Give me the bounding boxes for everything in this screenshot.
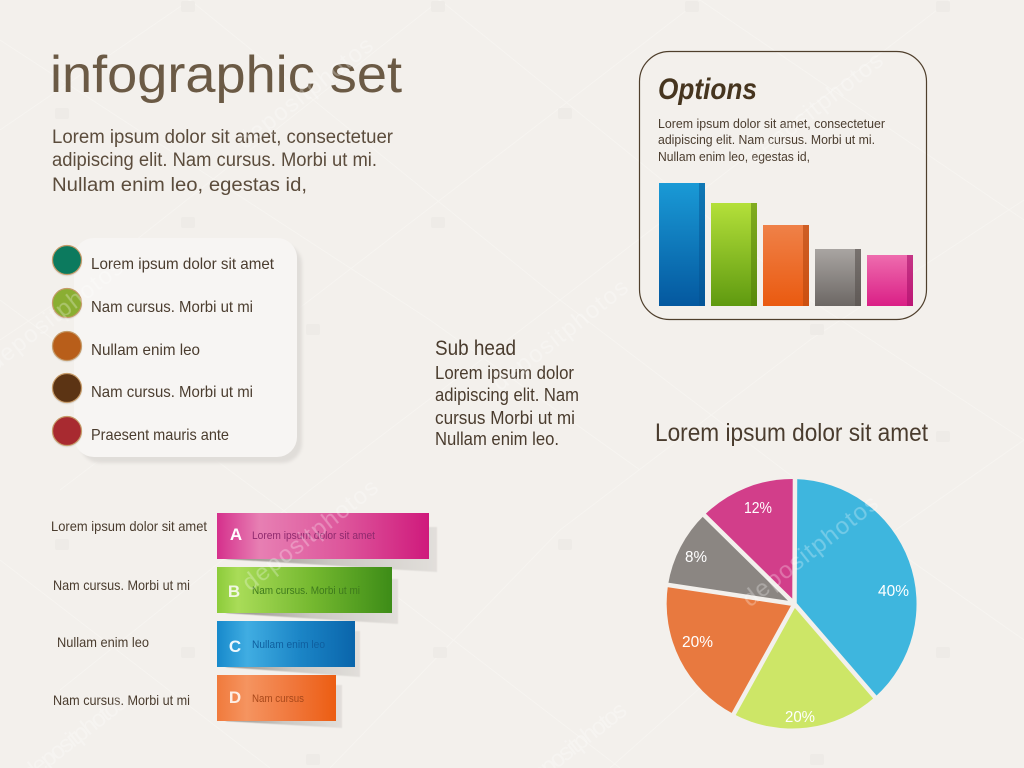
options text: adipiscing elit. Nam cursus. Morbi ut mi. <box>658 132 875 147</box>
legend labels: Nam cursus. Morbi ut mi <box>91 299 253 316</box>
bar: pink <box>867 255 913 306</box>
ribbon D: Nam cursus <box>252 693 304 705</box>
pie labels: 20% <box>682 634 713 651</box>
bar chart <box>659 183 913 306</box>
ribbon row labels: Nullam enim leo <box>57 634 149 650</box>
intro paragraph: adipiscing elit. Nam cursus. Morbi ut mi. <box>52 150 377 171</box>
ribbon C <box>217 621 360 677</box>
slice: blue 40% <box>794 479 917 697</box>
legend dot: brown <box>52 374 82 404</box>
panel: legend list <box>52 238 302 463</box>
bar: blue <box>659 183 705 306</box>
slice: orange 20% <box>667 585 794 714</box>
options text: Nullam enim leo, egestas id, <box>658 149 810 164</box>
ribbon row labels: Nam cursus. Morbi ut mi <box>53 692 190 708</box>
ribbon C: Nullam enim leo <box>252 639 325 651</box>
ribbon A <box>217 513 437 572</box>
sub head text block: Lorem ipsum dolor <box>435 363 574 383</box>
ribbon chart <box>217 513 437 728</box>
legend dot: red <box>52 416 82 447</box>
ribbon D <box>217 675 342 728</box>
bar: gray <box>815 249 861 306</box>
pie labels: 40% <box>878 583 909 600</box>
intro paragraph: Nullam enim leo, egestas id, <box>52 175 307 196</box>
legend labels: Nam cursus. Morbi ut mi <box>91 384 253 401</box>
ribbon A: A <box>230 525 242 544</box>
text: depositphotos <box>737 490 884 613</box>
sub head text block <box>435 337 579 449</box>
ribbon B: Nam cursus. Morbi ut mi <box>252 585 360 597</box>
slice: gray 8% <box>668 515 794 604</box>
ribbon row labels: Lorem ipsum dolor sit amet <box>51 518 207 534</box>
ribbon B: B <box>228 582 240 601</box>
ribbon row labels <box>51 518 207 708</box>
legend dot: green <box>52 246 82 276</box>
sub head text block: cursus Morbi ut mi <box>435 408 575 428</box>
pie labels <box>682 500 909 726</box>
legend dot: lime <box>52 288 82 319</box>
panel: options <box>640 52 926 320</box>
legend dot: orange <box>52 332 82 362</box>
options text: Lorem ipsum dolor sit amet, consectetuer <box>658 116 886 131</box>
pie labels: 8% <box>685 549 707 566</box>
ribbon A: Lorem ipsum dolor sit amet <box>252 530 375 542</box>
slice: lime 20% <box>734 604 875 729</box>
intro paragraph <box>52 127 394 196</box>
text: depositphotos <box>232 32 379 155</box>
sub head text block: Sub head <box>435 337 516 360</box>
text: depositphotos <box>487 274 634 397</box>
ribbon D: D <box>229 688 241 707</box>
ribbon B <box>217 567 398 624</box>
sub head text block: Nullam enim leo. <box>435 429 559 449</box>
ribbon row labels: Nam cursus. Morbi ut mi <box>53 577 190 593</box>
pie heading: Lorem ipsum dolor sit amet <box>655 419 928 447</box>
text: depositphotos <box>742 47 889 170</box>
title: infographic set <box>50 46 403 104</box>
intro paragraph: Lorem ipsum dolor sit amet, consectetuer <box>52 127 394 148</box>
pie labels: 20% <box>785 709 815 726</box>
sub head text block: adipiscing elit. Nam <box>435 385 579 405</box>
pie labels: 12% <box>744 500 772 517</box>
text: depositphotos <box>237 474 384 597</box>
bar: orange <box>763 225 809 306</box>
legend labels: Praesent mauris ante <box>91 427 229 444</box>
slice: pink 12% <box>704 479 795 604</box>
options text <box>658 116 886 164</box>
ribbon C: C <box>229 637 241 656</box>
pie chart <box>665 476 917 729</box>
legend labels: Nullam enim leo <box>91 342 200 359</box>
legend labels: Lorem ipsum dolor sit amet <box>91 256 275 273</box>
options heading: Options <box>658 73 757 106</box>
legend labels <box>91 256 275 444</box>
bar: green <box>711 203 757 306</box>
